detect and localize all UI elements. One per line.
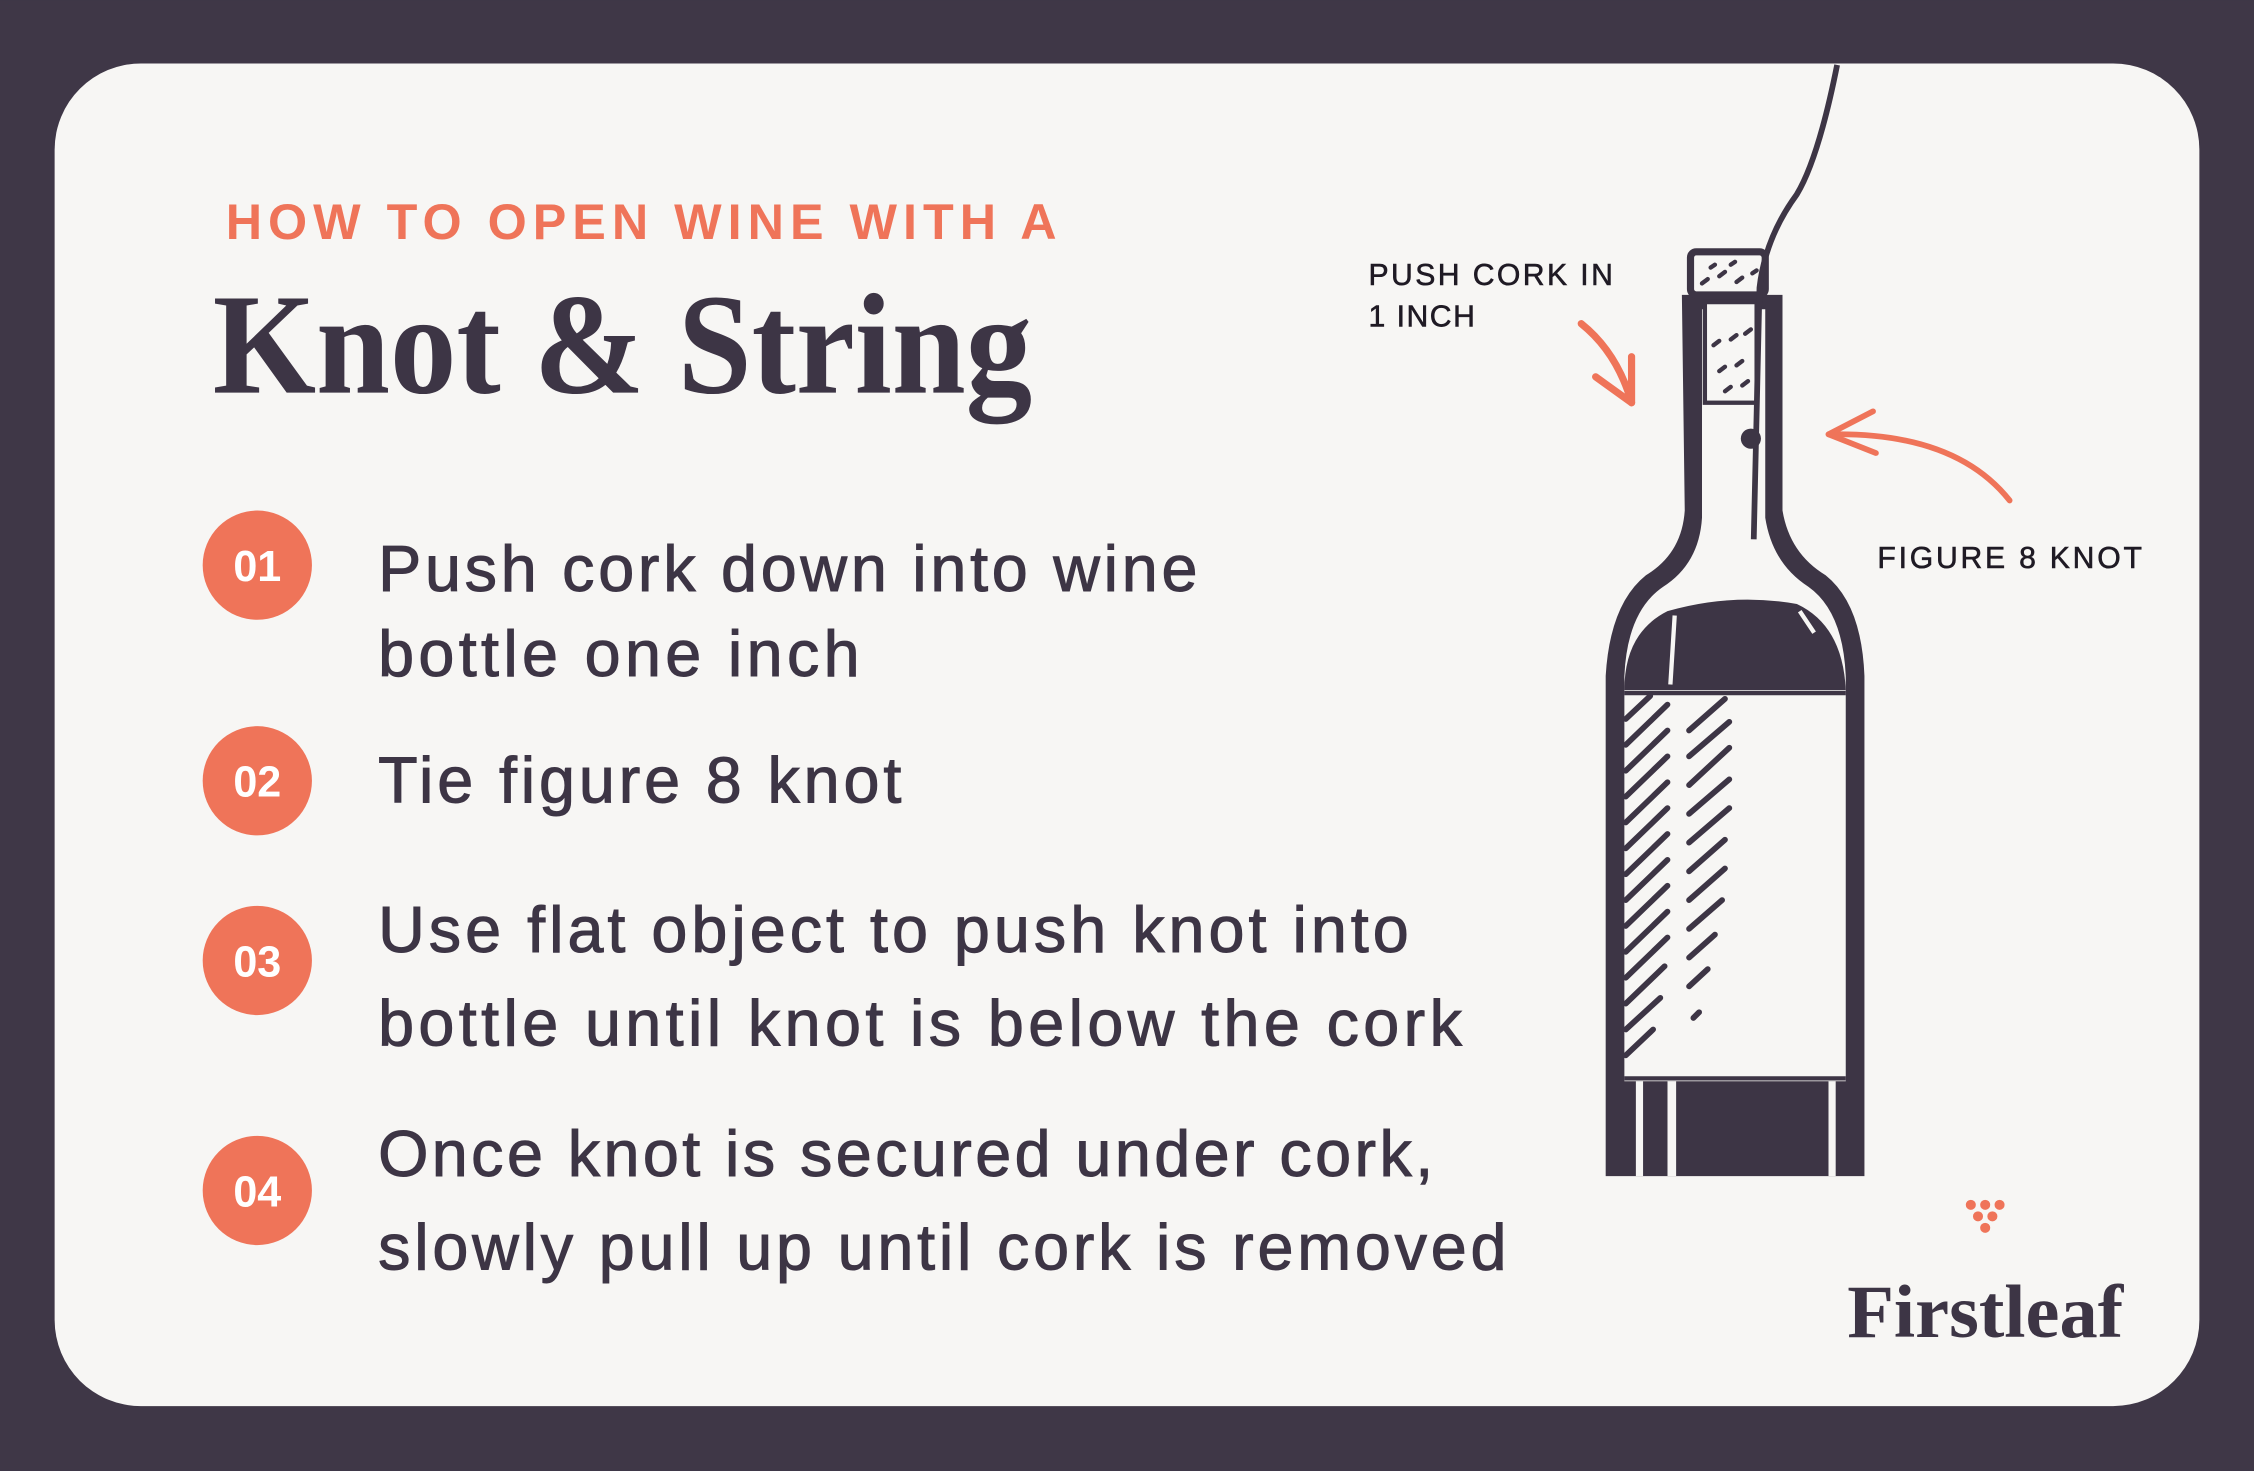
step 03 [203, 893, 1463, 1059]
step 04 [203, 1117, 1506, 1284]
step 03: Use flat object to push knot into [378, 893, 1409, 966]
logo: Firstleaf [1847, 1200, 2124, 1354]
step 04: 04 [233, 1168, 281, 1216]
step 04: Once knot is secured under cork, [378, 1117, 1433, 1190]
arrow: figure 8 knot [1828, 411, 2010, 500]
label: push cork in: 1 INCH [1368, 301, 1475, 334]
label: figure 8 knot: FIGURE 8 KNOT [1877, 542, 2142, 575]
step 03: bottle until knot is below the cork [378, 986, 1463, 1059]
step 02 [203, 726, 901, 835]
logo: Firstleaf: Firstleaf [1847, 1271, 2124, 1354]
illustration: wine bottle with string [1606, 65, 1864, 1176]
step 02: 02 [233, 759, 281, 807]
step 01 [203, 511, 1197, 690]
step 01: Push cork down into wine [378, 532, 1197, 605]
step 01: bottle one inch [378, 617, 860, 690]
step 02: Tie figure 8 knot [378, 743, 901, 816]
step 03: 03 [233, 938, 281, 986]
label: push cork in [1368, 259, 1613, 334]
step 01: 01 [233, 543, 281, 591]
arrow: push cork [1581, 324, 1632, 403]
label: push cork in: PUSH CORK IN [1368, 259, 1613, 292]
title: Knot & String [213, 266, 1032, 425]
step 04: slowly pull up until cork is removed [378, 1211, 1506, 1284]
title eyebrow: HOW TO OPEN WINE WITH A [226, 193, 1057, 250]
